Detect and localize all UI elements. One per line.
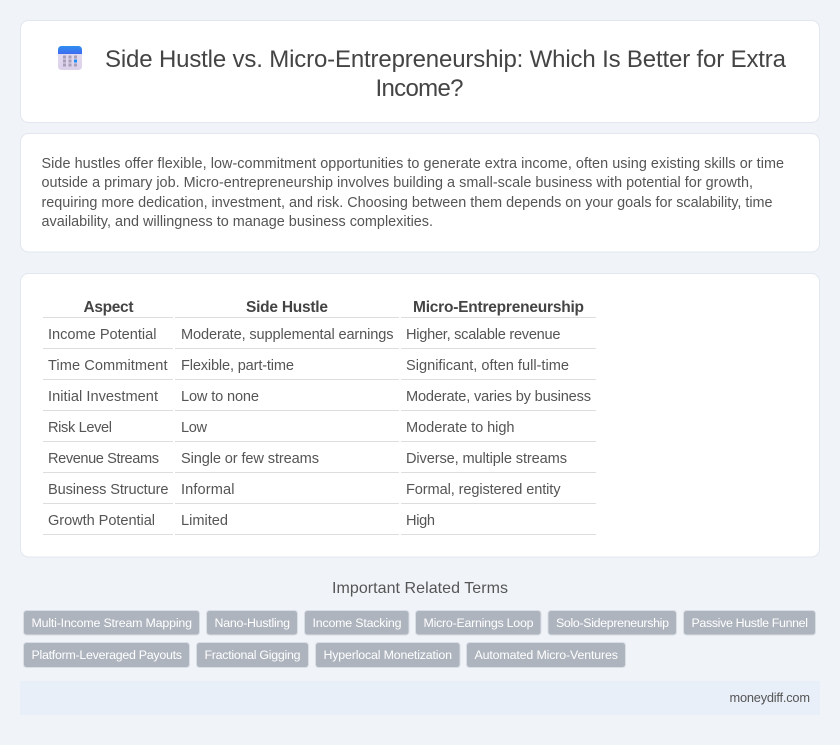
tag: Nano-Hustling <box>214 616 290 630</box>
row: initial investment <box>48 389 591 405</box>
row: time commitment: Significant, often full-time <box>406 358 569 374</box>
row: initial investment: Initial Investment <box>48 389 158 405</box>
tag <box>196 642 308 668</box>
row: business structure <box>48 482 561 498</box>
row: growth potential: Growth Potential <box>48 513 155 529</box>
row: business structure: Business Structure <box>48 482 168 498</box>
tag: Hyperlocal Monetization <box>324 648 452 662</box>
row: growth potential <box>48 513 435 529</box>
row: income potential: Higher, scalable revenue <box>406 327 560 343</box>
row: risk level <box>48 420 514 436</box>
text block: introduction paragraph: requiring more dedication, investment, and risk. Choosing between them depends on your goals for scalability, time <box>42 195 772 211</box>
table header: Side Hustle <box>246 299 328 316</box>
tag <box>304 610 409 635</box>
row: income potential: Moderate, supplemental earnings <box>181 327 394 343</box>
table header: Micro-Entrepreneurship <box>413 299 584 316</box>
tag: Multi-Income Stream Mapping <box>32 616 192 630</box>
tag: Fractional Gigging <box>204 648 301 662</box>
row: risk level: Low <box>181 420 207 436</box>
row: growth potential: High <box>406 513 435 529</box>
tag <box>466 642 626 668</box>
text block: introduction paragraph: Side hustles offer flexible, low-commitment opportunities to generate extra income, often using existing skills or time <box>42 156 784 172</box>
tag: Solo-Sidepreneurship <box>556 616 669 630</box>
row: revenue streams <box>48 451 567 467</box>
tag: Income Stacking <box>312 616 402 630</box>
row: initial investment: Low to none <box>181 389 259 405</box>
footer <box>20 681 820 715</box>
panel: title card <box>20 20 820 122</box>
row: risk level: Moderate to high <box>406 420 514 436</box>
tag: Passive Hustle Funnel <box>692 616 808 630</box>
title: Side Hustle vs. Micro-Entrepreneurship: Which Is Better for Extra <box>105 46 787 73</box>
row: revenue streams: Single or few streams <box>181 451 319 467</box>
row: initial investment: Moderate, varies by business <box>406 389 591 405</box>
row: time commitment <box>48 358 569 374</box>
row: time commitment: Time Commitment <box>48 358 168 374</box>
row: income potential: Income Potential <box>48 327 156 343</box>
row: time commitment: Flexible, part-time <box>181 358 294 374</box>
row: revenue streams: Revenue Streams <box>48 451 159 467</box>
panel: introduction <box>20 134 820 252</box>
row: revenue streams: Diverse, multiple streams <box>406 451 567 467</box>
icon: calendar <box>58 46 82 70</box>
text block: introduction paragraph: outside a primary job. Micro-entrepreneurship involves building a small-scale business with potential for growth, <box>42 175 753 191</box>
panel: comparison table <box>20 274 820 557</box>
tag: Automated Micro-Ventures <box>474 648 618 662</box>
tags: related terms <box>24 610 816 668</box>
tag <box>24 642 190 668</box>
title: Income? <box>376 75 464 102</box>
tag <box>416 610 541 635</box>
footer text: moneydiff.com <box>730 690 810 705</box>
tag <box>206 610 298 635</box>
row: income potential <box>48 327 560 343</box>
row: business structure: Formal, registered entity <box>406 482 561 498</box>
table header <box>84 299 584 316</box>
tag <box>316 642 460 668</box>
tag <box>24 610 200 635</box>
row: business structure: Informal <box>181 482 234 498</box>
tag <box>684 610 816 635</box>
row: risk level: Risk Level <box>48 420 112 436</box>
text block: introduction paragraph: availability, and willingness to manage business complexities. <box>42 214 433 230</box>
tag: Micro-Earnings Loop <box>424 616 534 630</box>
row: growth potential: Limited <box>181 513 228 529</box>
heading: important related terms: Important Related Terms <box>332 580 508 597</box>
table header: Aspect <box>84 299 134 316</box>
tag <box>548 610 676 635</box>
tag: Platform-Leveraged Payouts <box>32 648 182 662</box>
